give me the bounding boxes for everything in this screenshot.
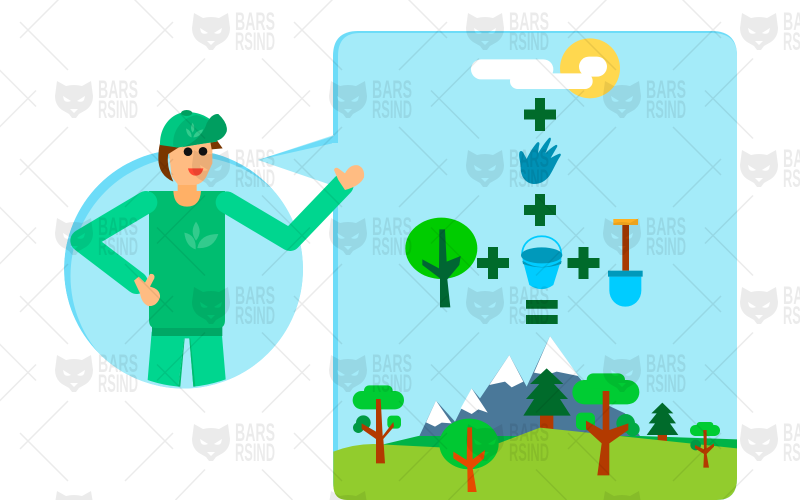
- watermark logos: BARS: [235, 419, 275, 447]
- sweater leaf logo: [184, 222, 218, 249]
- face: [168, 140, 212, 185]
- hand lower: [134, 274, 160, 306]
- tree left: [353, 385, 404, 463]
- background circle: [64, 150, 310, 396]
- hair: [158, 140, 223, 182]
- watermark logos: BARS: [646, 213, 686, 241]
- watermark logos: RSIND: [646, 370, 686, 398]
- sweater: [149, 191, 225, 328]
- landscape: [333, 336, 737, 500]
- watermark logos: BARS: [235, 282, 275, 310]
- watermark logos: RSIND: [235, 302, 275, 330]
- watermark logos: RSIND: [98, 233, 138, 261]
- plus sign left: [477, 247, 509, 279]
- speech bubble panel: [258, 31, 737, 500]
- watermark logos: RSIND: [509, 165, 549, 193]
- watermark logos: BARS: [509, 282, 549, 310]
- watermark logos: BARS: [235, 8, 275, 36]
- watermark logos: BARS: [509, 145, 549, 173]
- watermark logos: BARS: [372, 350, 412, 378]
- tree small right: [690, 422, 720, 468]
- watermark logos: RSIND: [509, 302, 549, 330]
- trousers: [148, 332, 226, 387]
- watermark logos: RSIND: [646, 233, 686, 261]
- watermark logos: RSIND: [235, 28, 275, 56]
- watermark logos: RSIND: [235, 439, 275, 467]
- plus sign top: [524, 98, 556, 131]
- watermark logos: RSIND: [509, 28, 549, 56]
- arm left: [82, 202, 146, 283]
- watermark logos: BARS: [235, 145, 275, 173]
- collar and neck: [173, 173, 201, 207]
- waistband: [152, 325, 222, 336]
- icon: tree: [405, 218, 477, 307]
- watermark logos: RSIND: [372, 233, 412, 261]
- plus sign middle: [524, 194, 556, 226]
- watermark logos: BARS: [646, 76, 686, 104]
- cap: [160, 110, 227, 148]
- person: [64, 110, 364, 395]
- arm right: [227, 185, 343, 240]
- watermark logos: BARS: [98, 76, 138, 104]
- icon: shovel: [608, 219, 643, 307]
- watermark logos: BARS: [98, 350, 138, 378]
- watermark logos: BARS: [98, 213, 138, 241]
- watermark logos: RSIND: [98, 370, 138, 398]
- fir tree large: [523, 368, 571, 430]
- watermark logos: BARS: [372, 76, 412, 104]
- watermark logos: RSIND: [509, 439, 549, 467]
- mountains: [419, 336, 640, 436]
- tree large: [572, 373, 640, 475]
- watermark logos: RSIND: [235, 165, 275, 193]
- back hill: [383, 428, 737, 457]
- icon: glove: [519, 138, 561, 184]
- fir tree small: [647, 403, 678, 443]
- watermark logos: BARS: [509, 8, 549, 36]
- eyes: [184, 147, 207, 156]
- watermark logos: RSIND: [372, 96, 412, 124]
- watermark logos: BARS: [372, 213, 412, 241]
- icon: bucket: [521, 236, 562, 289]
- equals sign: [526, 300, 558, 324]
- ground: [333, 428, 737, 500]
- watermark logos: RSIND: [372, 370, 412, 398]
- watermark logos: BARS: [509, 419, 549, 447]
- mouth: [188, 168, 203, 176]
- sun and clouds: [471, 38, 620, 98]
- hand upper: [334, 165, 364, 190]
- watermark logos: BARS: [646, 350, 686, 378]
- watermark logos: RSIND: [646, 96, 686, 124]
- plus sign right: [568, 247, 600, 279]
- tree round: [439, 419, 499, 492]
- watermark logos: RSIND: [98, 96, 138, 124]
